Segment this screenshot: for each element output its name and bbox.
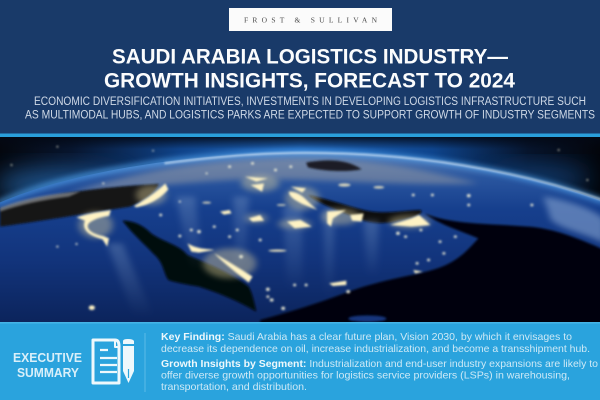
key finding text <box>161 331 590 355</box>
header background <box>0 0 600 134</box>
globe surface <box>0 153 600 330</box>
scattered small lights <box>11 146 588 310</box>
accent rule under header <box>0 134 600 137</box>
subtitle <box>25 96 595 122</box>
vertical light rays <box>106 194 381 300</box>
growth insights text: transportation, and distribution. <box>161 381 307 393</box>
satellite image: Arabian peninsula at night <box>0 137 600 330</box>
logo: Frost & Sullivan <box>229 8 392 31</box>
divider <box>144 333 146 392</box>
city lights <box>77 177 430 310</box>
growth insights text: offer diverse growth opportunities for logistics service providers (LSPs) in warehousing, <box>161 370 570 382</box>
Mediterranean Sea <box>0 184 159 227</box>
key finding text: decrease its dependence on oil, increase industrialization, and become a transshipment hub. <box>161 343 590 355</box>
space sky <box>0 137 600 202</box>
northern haze land <box>69 158 478 193</box>
title: SAUDI ARABIA LOGISTICS INDUSTRY— <box>112 46 508 68</box>
logo: Frost & Sullivan: FROST & SULLIVAN <box>244 16 378 24</box>
executive summary label <box>13 351 82 380</box>
growth insights text: Growth Insights by Segment: Industrialization and end-user industry expansions are likely to <box>161 358 598 370</box>
executive summary label: SUMMARY <box>17 366 80 380</box>
Persian Gulf <box>308 195 422 223</box>
executive summary band <box>0 322 600 400</box>
icon: document and pencil <box>93 339 134 383</box>
land haze left <box>0 192 80 212</box>
atmosphere limb <box>0 153 600 204</box>
growth insights text <box>161 358 598 393</box>
title <box>104 46 515 92</box>
executive summary label: EXECUTIVE <box>13 351 82 365</box>
Arabian Sea <box>260 213 600 330</box>
Socotra-side blue patch <box>348 315 386 322</box>
Black Sea <box>306 160 362 171</box>
key finding text: Key Finding: Saudi Arabia has a clear future plan, Vision 2030, by which it envisages to <box>161 331 572 343</box>
Red Sea <box>122 221 256 312</box>
title: GROWTH INSIGHTS, FORECAST TO 2024 <box>104 70 515 92</box>
city glow <box>78 175 430 278</box>
